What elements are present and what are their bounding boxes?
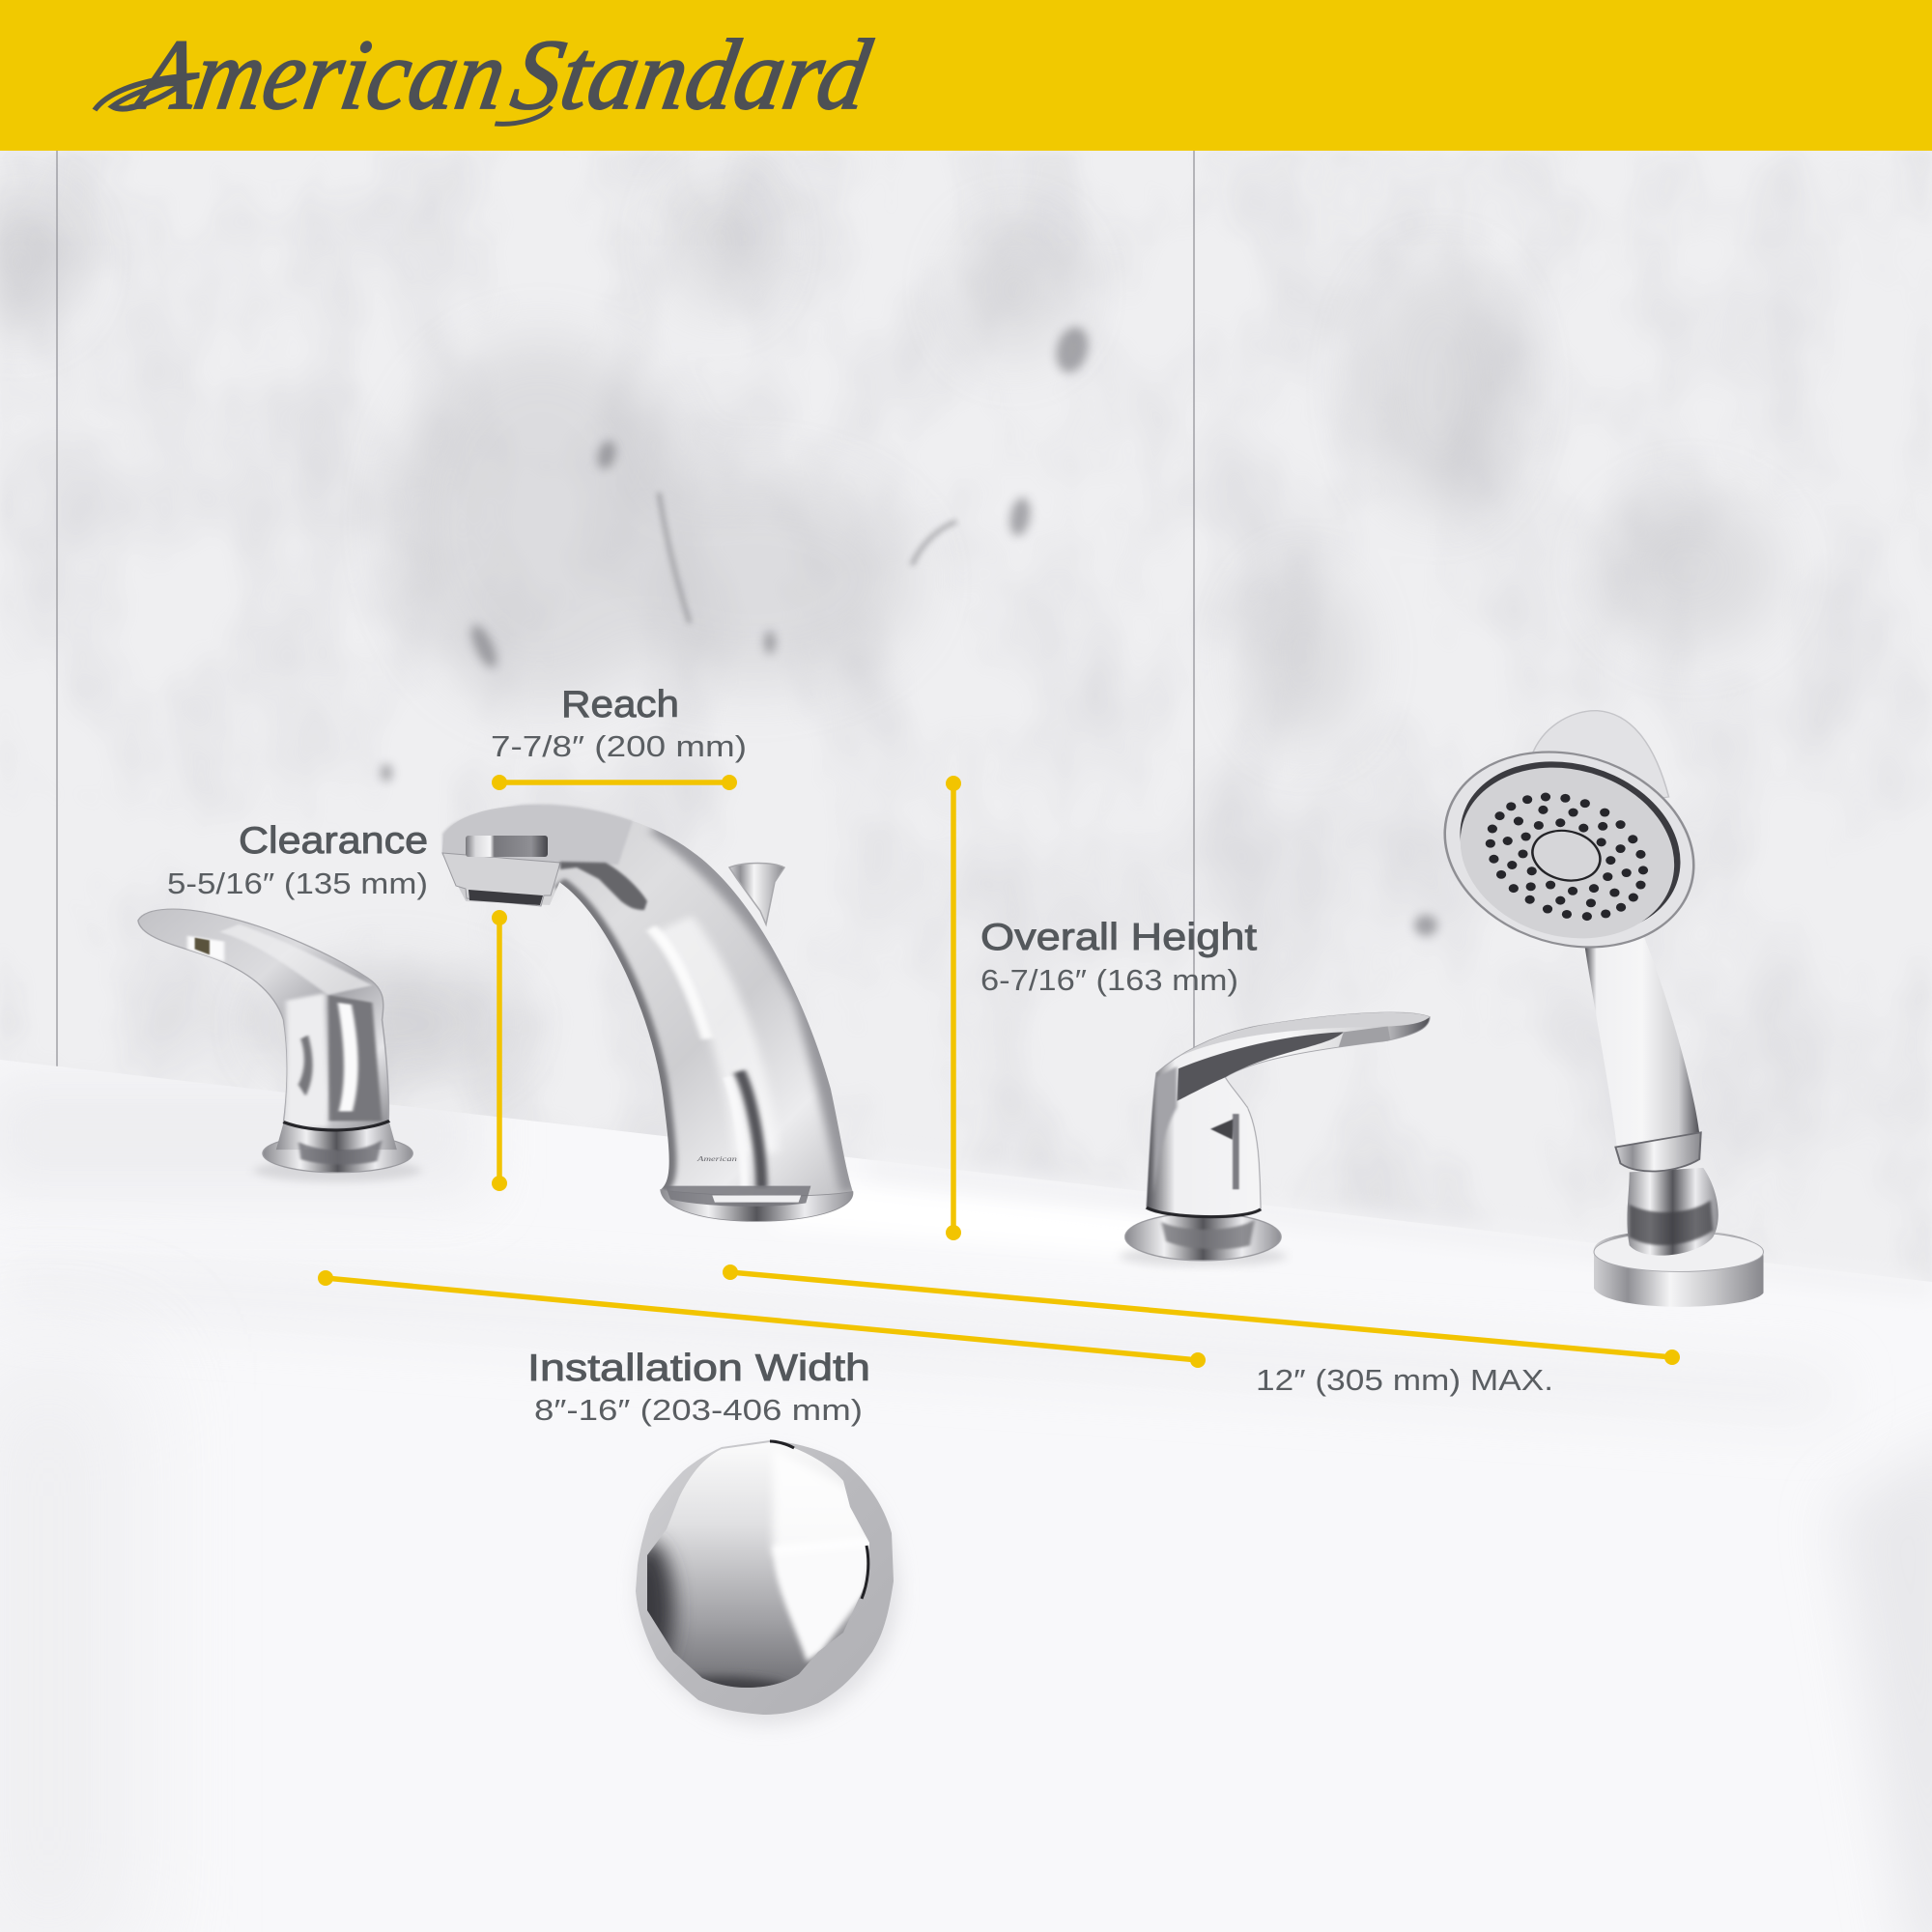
label: overall height (980, 917, 1257, 997)
label: clearance (167, 820, 428, 900)
label: maximum spacing: 12″ (305 mm) MAX. (1256, 1363, 1553, 1397)
shower head back (1531, 711, 1669, 806)
label: overall height: 6-7/16″ (163 mm) (980, 963, 1238, 997)
logo: American Standard: American (125, 19, 515, 130)
label: reach (491, 684, 747, 763)
dimension: installation width (318, 1270, 1206, 1368)
left handle reflections (187, 924, 383, 1126)
label: installation width: 8″-16″ (203-406 mm) (534, 1393, 863, 1427)
dimension: reach (492, 775, 737, 790)
shower collar (1615, 1132, 1701, 1172)
spout arch shadow (560, 862, 647, 910)
left handle collar (276, 1122, 397, 1150)
label: reach: Reach (561, 684, 679, 725)
aerator underside (442, 853, 560, 906)
label: clearance: 5-5/16″ (135 mm) (167, 867, 428, 900)
right handle lever (1147, 1012, 1430, 1216)
spout (442, 804, 853, 1221)
spout head top (442, 804, 633, 865)
soft deck edge (869, 1154, 1932, 1299)
dimension: hand shower spacing (723, 1264, 1680, 1365)
drain edge glint (770, 1441, 868, 1599)
dimension: overall height (946, 776, 961, 1240)
shower center disc (1524, 823, 1608, 889)
header band (0, 0, 1932, 151)
tub shading (0, 1072, 1932, 1932)
right handle reflections (1153, 1012, 1430, 1194)
overflow drain (624, 1430, 898, 1724)
label: overall height: Overall Height (980, 917, 1257, 958)
logo: American Standard (91, 19, 878, 130)
tile grout lines (57, 151, 1194, 1066)
shower swivel (1627, 1168, 1719, 1256)
marble wall (0, 151, 1932, 1310)
shower mount base (1594, 1231, 1764, 1307)
left handle base (263, 1134, 412, 1173)
drain dome (624, 1430, 889, 1704)
shower nozzles (1486, 793, 1648, 921)
shower handle (1585, 937, 1699, 1149)
label: reach: 7-7/8″ (200 mm) (491, 729, 747, 763)
spout logo mark: American (696, 1155, 737, 1163)
label: installation width: Installation Width (527, 1348, 870, 1389)
aerator outlet (469, 890, 543, 905)
aerator face (466, 836, 548, 857)
spout base ring (661, 1190, 853, 1221)
shower head rim (1406, 715, 1733, 984)
lift rod (729, 864, 784, 924)
spout body (442, 806, 853, 1221)
hand shower (1406, 711, 1764, 1307)
left handle (138, 909, 421, 1182)
drain plate (636, 1440, 894, 1715)
logo: American Standard: Standard (504, 19, 878, 130)
right handle (1120, 1012, 1430, 1266)
left handle lever (138, 909, 388, 1128)
dimension: clearance (492, 910, 507, 1191)
label: installation width (527, 1348, 870, 1427)
label: clearance: Clearance (239, 820, 428, 862)
shower face (1426, 735, 1709, 971)
right handle base (1125, 1213, 1281, 1261)
